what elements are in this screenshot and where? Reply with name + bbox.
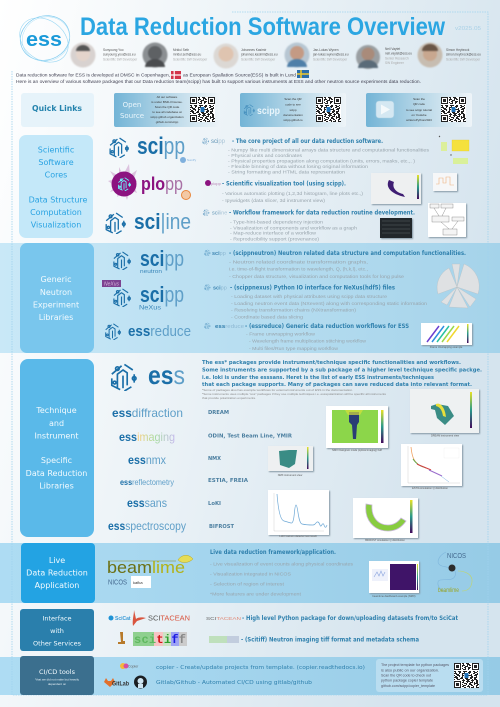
text block: scippneutron	[205, 250, 466, 279]
text block: scipp core	[203, 138, 430, 174]
logo: copier	[120, 663, 139, 669]
logo: beamlime: NICOS	[108, 580, 127, 586]
chart: beamtime dashboard: beamtime dashboard example (NMX)	[372, 594, 416, 598]
diagram: workflow graph	[428, 203, 466, 237]
team member: Jan-Lukas Wynen: Jan-Lukas Wynen	[313, 48, 339, 52]
logos: GitLab and GitHub	[104, 676, 147, 688]
library: essspectroscopy: essspectroscopy	[108, 519, 186, 533]
card: project template: is also public on our organization.	[381, 668, 439, 672]
library: esssans: esssans	[127, 496, 167, 510]
team member: Mridul Seth	[142, 42, 208, 68]
chart: DREAM instrument view: DREAM instrument view	[431, 434, 459, 438]
library: essimaging: ODIN, Test Beam Line, YMIR	[208, 434, 292, 440]
logo: sciline	[106, 209, 191, 234]
card: scipp tutorial video: Scan the	[413, 97, 425, 101]
card: scipp documentation: scipp	[257, 106, 280, 117]
text block: scippnexus: - Coordinate based data slicing	[231, 315, 303, 320]
text block: copier and gitlab: Gitlab/Github - Automated CI/CD using gitlab/github	[156, 680, 313, 686]
chart: NMX instrument view: NMX instrument view	[278, 473, 302, 477]
library: esssans: LoKI	[208, 501, 221, 507]
panel: live data reduction label	[21, 543, 95, 603]
text block: scippneutron: - Neutron related coordinate transformation graphs,	[229, 260, 368, 264]
card: scipp documentation	[240, 93, 346, 127]
panel: interface label	[20, 609, 94, 651]
logo: scippnexus: NeXus	[104, 282, 120, 288]
text block: live application: - Visualization integrated in NICOS	[210, 572, 291, 577]
team member: Neil Vaytet: Senior Research	[385, 56, 409, 60]
text block: essreduce: ess reduce	[215, 324, 244, 330]
team member: Jan-Lukas Wynen: Scientific SW Developer	[313, 58, 348, 62]
text block: sciline: sciline	[212, 210, 227, 216]
text block: scippnexus: - Resolving transformation chains (NXtransformation)	[231, 308, 357, 313]
introduction text: Data reduction software for ESS is developed at DMSC in Copenhagen,	[16, 72, 170, 78]
card: scipp documentation: documentation	[283, 113, 303, 117]
chart: beamtime dashboard	[369, 561, 419, 598]
text block: scipp core: - Physical units and coordinates	[228, 153, 303, 158]
card: open source: Scan the QR code	[155, 105, 180, 109]
panel: technique and instrument label: Instrument	[34, 432, 79, 440]
panel: generic neutron experiment libraries label	[20, 243, 94, 353]
chart: NMX histogram: NMX histogram mode (optical imaging) fsdf	[332, 448, 382, 452]
card: scipp tutorial video: to see scipp tutorial	[406, 108, 432, 112]
text block: essreduce: - Frame unwrapping workflow	[246, 332, 316, 337]
card: scipp tutorial video: on Youtube	[411, 113, 427, 117]
title: Data Reduction Software Overview	[80, 13, 445, 41]
panel: scientific software cores label: Visualization	[31, 220, 81, 230]
team member: Johannes Kasimir: johannes.kasimir@ess.eu	[240, 52, 278, 56]
library: essreflectometry: essreflectometry	[120, 477, 175, 487]
text block: ess packages intro: that each package supports. Many of packages can save reduced data into relevant format.	[202, 382, 472, 388]
text block: scippnexus	[205, 284, 428, 320]
panel: generic neutron experiment libraries label: Libraries	[39, 313, 73, 322]
logo: essreduce	[106, 323, 191, 340]
team member: Simon Heybrock	[418, 42, 481, 68]
logo: plopp	[108, 164, 190, 200]
panel: scientific software cores label: Software	[38, 158, 74, 167]
team member: Johannes Kasimir: Scientific SW Developer	[241, 58, 276, 62]
chart: BIFROST simulation	[353, 498, 418, 542]
team member: Neil Vaytet	[356, 45, 412, 69]
team member: Jan-Lukas Wynen: jan-lukas.wynen@ess.eu	[312, 52, 349, 56]
panel: interface label: Interface	[42, 614, 72, 622]
card: scipp documentation: scipp.github.io	[283, 118, 303, 122]
logo: scipp: scipp	[137, 133, 185, 160]
logo: copier: Copier	[128, 664, 139, 668]
team member: Johannes Kasimir	[214, 44, 278, 68]
text block: scitacean: - High level Python package for down/uploading datasets from/to SciCat	[242, 615, 458, 622]
panel: scientific software cores label: Scientific	[38, 146, 74, 154]
library: essdiffraction: essdiffraction	[112, 406, 183, 420]
chart: 3d plot	[371, 173, 421, 204]
logos: microscope and scitiff: scitiff	[134, 633, 186, 647]
panel: interface label: Other Services	[33, 640, 82, 648]
text block: scippneutron: - (scippneutron) Neutron related data structure and computation functionalities.	[229, 250, 466, 257]
illustration: chopper wheel	[437, 264, 479, 308]
text block: sciline	[203, 209, 415, 241]
logo: scippnexus: NeXus	[139, 306, 161, 312]
diagram: NICOS kafka beamlime: beamlime	[438, 588, 460, 594]
chart: NMX instrument view	[268, 446, 313, 477]
card: scipp documentation: scipp	[289, 108, 297, 112]
logo: beamlime: kafka	[133, 580, 143, 585]
text block: sciline: - Workflow framework for data reduction routine development.	[229, 210, 415, 216]
panel: live data reduction label: Application	[35, 581, 79, 590]
panel: CI/CD tools label: *that we did not make but heavily	[35, 678, 80, 682]
text block: scippneutron: i.e. time-of-flight transformation to wavelength, Q, (h,k,l), etc.,	[229, 266, 368, 272]
team member: Sunyoung Yoo	[70, 42, 138, 68]
panel: technique and instrument label: and	[49, 419, 64, 428]
panel: quick links	[21, 93, 94, 127]
library: essreflectometry: ESTIA, FREIA	[208, 478, 248, 484]
library: essnmx	[128, 453, 221, 467]
text block: ess packages intro: The ess* packages provide instrument/technique specific functionalities and workflows.	[202, 360, 461, 366]
text block: plopp: - Ipywidgets (data slicer, 3d instrument view)	[222, 198, 326, 203]
panel: CI/CD tools label: CI/CD tools	[39, 668, 76, 676]
chart: NMX histogram	[326, 406, 388, 452]
logo: plopp: plopp	[141, 174, 183, 194]
diagram: NICOS kafka beamlime	[438, 552, 472, 594]
logos: GitLab and GitHub: GitLab	[112, 682, 129, 688]
panel: CI/CD tools label: dependent on	[48, 682, 67, 686]
table: dark output	[380, 218, 412, 238]
panel: technique and instrument label	[20, 359, 94, 537]
logo: ess	[112, 360, 185, 391]
card: scipp tutorial video	[366, 93, 472, 127]
text block: sciline: - Reproducibility support (provenance)	[230, 236, 320, 241]
logo: sciline: sci|ine	[134, 209, 191, 234]
card: scipp documentation: Scan the QR	[284, 97, 302, 101]
introduction text: Here is an overview of various software packages that our Data reduction team(scipp) has built to support various instruments at ESS and other neutron source experiments data reduction.	[16, 79, 421, 85]
text block: plopp	[205, 180, 364, 203]
text block: live application: Live data reduction framework/application.	[210, 549, 336, 556]
team member: Sunyoung Yoo: sunyoung.yoo@ess.eu	[103, 52, 136, 56]
footnotes: that provide polarization experiments.	[202, 396, 256, 400]
text block: sciline: - Map-reduce interface of a workflow	[230, 231, 317, 236]
footnotes: *Some of packages also has example workflows for external instruments out of ESS in the documentation.	[202, 388, 353, 392]
panel: technique and instrument label: Libraries	[39, 482, 74, 490]
version label: v2025.05	[455, 26, 481, 32]
text block: scitacean: SCI TACEAN	[206, 616, 241, 621]
library: essimaging	[119, 430, 292, 444]
panel: quick links: Quick Links	[32, 104, 82, 113]
card: open source: Source	[120, 112, 144, 120]
card: open source: to see all codebase at	[152, 110, 182, 114]
panel: generic neutron experiment libraries label: Neutron	[40, 288, 72, 297]
text block: scippneutron: scipp	[212, 251, 226, 257]
logo: beamlime	[107, 555, 193, 588]
panel: live data reduction label: Live	[49, 556, 65, 565]
team member: Mridul Seth: mridul.seth@ess.eu	[173, 52, 201, 56]
introduction text: as European Spallation Source(ESS) is built in Lund	[183, 72, 296, 78]
text block: live application	[210, 549, 354, 597]
panel: live data reduction label: Data Reduction	[26, 568, 88, 578]
library: essdiffraction: DREAM	[208, 410, 229, 416]
card: open source: Open	[123, 101, 141, 109]
text block: scipp core: - String formatting and HTML data representation	[228, 170, 346, 174]
text block: plopp: - Various automatic plotting (1,2,3d histogram, line plots etc.,)	[222, 191, 364, 196]
text block: essreduce: - Multi files/Run type mapping workflow	[249, 346, 339, 351]
panel: CI/CD tools label	[20, 656, 94, 695]
text block: scippnexus: scipp	[213, 286, 227, 292]
library: essspectroscopy	[108, 519, 234, 533]
footnotes	[202, 388, 387, 400]
text block: scipp core: - The core project of all our data reduction software.	[232, 138, 383, 145]
card: open source: All our software	[157, 95, 178, 99]
panel: scientific software cores label: Computation	[30, 208, 82, 217]
text block: essreduce	[205, 323, 409, 351]
text block: scippnexus: - Loading neutron event data (NXevent) along with corresponding static information	[231, 301, 428, 306]
chart: frame unwrapping: Frame Unwrapping example	[430, 345, 463, 349]
library: essreflectometry	[120, 477, 248, 487]
logos: SciCat and Scitacean	[108, 610, 190, 626]
team member: Jan-Lukas Wynen	[284, 42, 349, 68]
band: live data reduction	[0, 543, 500, 603]
text block: scipp core: - Physical properties propagation along computation (units, errors, masks, etc.,. )	[228, 158, 416, 164]
logo: scippneutron	[114, 246, 184, 275]
text block: scippnexus: - Loading dataset with physical attributes using scipp data structure	[231, 294, 387, 299]
card: open source: github.com/scipp	[156, 120, 179, 124]
card: scipp tutorial video: QR code	[413, 102, 425, 106]
team member: Mridul Seth: Mridul Seth	[173, 48, 189, 52]
team member: Neil Vaytet: neil.vaytet@ess.eu	[385, 52, 412, 56]
illustration: data array cubes	[439, 136, 469, 164]
logos: SciCat and Scitacean: SciCat	[115, 616, 131, 622]
panel: generic neutron experiment libraries label: Generic	[40, 275, 72, 284]
chart: LoKI detector	[268, 490, 329, 538]
panel: scientific software cores label	[19, 135, 93, 238]
panel: technique and instrument label: Data Reduction	[26, 469, 87, 478]
text block: ess packages intro: i.e. loki is under the esssans. Heret is the list of early ESS instruments/techniques	[202, 375, 435, 381]
text block: sciline: - Type-hint-based dependency injection	[230, 220, 324, 225]
logo: scippneutron: neutron	[140, 269, 162, 275]
text block: scippneutron: - Chopper data structure, visualization and computation tools for long pulse	[229, 274, 405, 279]
chart: frame unwrapping	[421, 323, 472, 349]
team member: Neil Vaytet: Neil Vaytet	[385, 47, 400, 51]
card: project template: github.com/scipp/copier_template	[381, 684, 435, 688]
text block: live application: - Selection of region of interest	[210, 582, 285, 587]
logos: SciCat and Scitacean: SCITACEAN	[148, 614, 190, 622]
text block: scipp core: scipp	[211, 139, 226, 145]
text block: plopp: - Scientific visualization tool (using scipp).	[222, 180, 346, 188]
card: scipp documentation: code to see	[285, 102, 301, 106]
logo: scipp: NumPy	[187, 158, 197, 162]
team member: Johannes Kasimir: Johannes Kasimir	[241, 48, 267, 52]
panel: technique and instrument label: Specific	[41, 456, 72, 465]
text block: scipp core: - Flexible binning of data without losing original information	[228, 164, 369, 169]
chart: LoKI detector: LoKI Cannon detector test result	[279, 534, 317, 538]
team member: Sunyoung Yoo: Scientific SW Developer	[103, 58, 138, 62]
text block: copier and gitlab	[156, 665, 365, 686]
chart: line plot	[433, 173, 457, 191]
text block: ess packages intro: Some instruments are supported by a sub package of a higher level technique specific packge.	[202, 368, 482, 374]
chart: ESTIA simulation	[401, 444, 462, 490]
text block: sciline: - Visualization of components and workflow as a graph	[230, 225, 358, 230]
text block: live application: - Live visualization of event counts along physical coordinates	[210, 562, 354, 567]
text block: ess packages intro	[202, 360, 482, 388]
text block: copier and gitlab: copier - Create/update projects from template. (copier.readthedocs.io)	[156, 665, 365, 671]
card: open source	[114, 93, 220, 127]
logo: essreduce: essreduce	[128, 323, 191, 340]
card: project template: python package copier template	[381, 678, 433, 682]
text block: plopp: plopp	[211, 181, 222, 186]
library: esssans	[127, 496, 221, 510]
card: scipp tutorial video: at EuroPython2023	[406, 118, 432, 122]
band: generic libraries	[0, 243, 500, 353]
card: project template: Scan the QR code to check out	[381, 674, 431, 678]
logo: beamlime: beamlime	[107, 558, 185, 577]
text block: live application: *More features are under development	[210, 592, 302, 597]
logo: scippneutron: scipp	[140, 246, 184, 271]
team member: Sunyoung Yoo: Sunyoung Yoo	[103, 48, 124, 52]
card: project template: The project template for python packages	[381, 663, 449, 667]
team member: Simon Heybrock: Scientific SW Developer	[446, 58, 481, 62]
team member: Simon Heybrock: simon.heybrock@ess.eu	[446, 52, 481, 56]
logo: ess: ess	[148, 360, 185, 390]
panel: scientific software cores label: Data Structure	[29, 196, 88, 204]
card: open source: is under BSD-3 license.	[151, 100, 183, 104]
panel: technique and instrument label: Technique	[35, 406, 77, 415]
chart: BIFROST simulation: BIFROST simulation Q distribution	[365, 538, 405, 542]
card: open source: scipp github organization	[150, 115, 184, 119]
library: essimaging: essimaging	[119, 430, 175, 444]
introduction text	[16, 70, 421, 85]
text block: essreduce: - (essreduce) Generic data reduction workflows for ESS	[245, 323, 409, 330]
text block: scipp core: - Numpy like multi dimensional arrays data structure and computational functionalities	[228, 148, 430, 152]
panel: interface label: with	[50, 627, 64, 635]
ESS logo	[11, 9, 77, 71]
band: CI/CD tools	[0, 657, 500, 695]
logo: scipp	[110, 133, 197, 163]
library: essnmx: NMX	[208, 456, 221, 462]
text block: scitiff: - (Scitiff) Neutron imaging tiff format and metadata schema	[241, 636, 419, 644]
team member: Mridul Seth: Scientific SW Developer	[173, 58, 208, 62]
chart: ESTIA simulation: ESTIA simulation Q distribution	[412, 486, 448, 490]
library: essnmx: essnmx	[128, 453, 166, 467]
panel: scientific software cores label: Cores	[45, 170, 67, 180]
library: essspectroscopy: BIFROST	[209, 524, 234, 530]
chart: DREAM instrument view	[410, 389, 479, 438]
ESS logo: ess	[26, 29, 62, 51]
logo: scippnexus: scipp	[140, 282, 184, 307]
library: essdiffraction	[112, 406, 229, 420]
text block: scippnexus: - (scippnexus) Python IO interface for NeXus(hdf5) files	[230, 284, 395, 292]
card: project template	[376, 659, 483, 692]
team member: Neil Vaytet: SW Engineer	[385, 61, 405, 65]
footnotes: *Some instruments uses multiple "ess" packages if they use multiple techniques i.e. essspolarization will be specific all instruments	[202, 392, 387, 396]
team member: Simon Heybrock: Simon Heybrock	[446, 48, 470, 52]
diagram: NICOS kafka beamlime: NICOS	[447, 553, 466, 560]
logo: scippnexus	[102, 280, 184, 312]
text block: essreduce: - Wavelength frame multiplication stitching workflow	[249, 339, 367, 344]
panel: generic neutron experiment libraries label: Experiment	[33, 300, 79, 310]
